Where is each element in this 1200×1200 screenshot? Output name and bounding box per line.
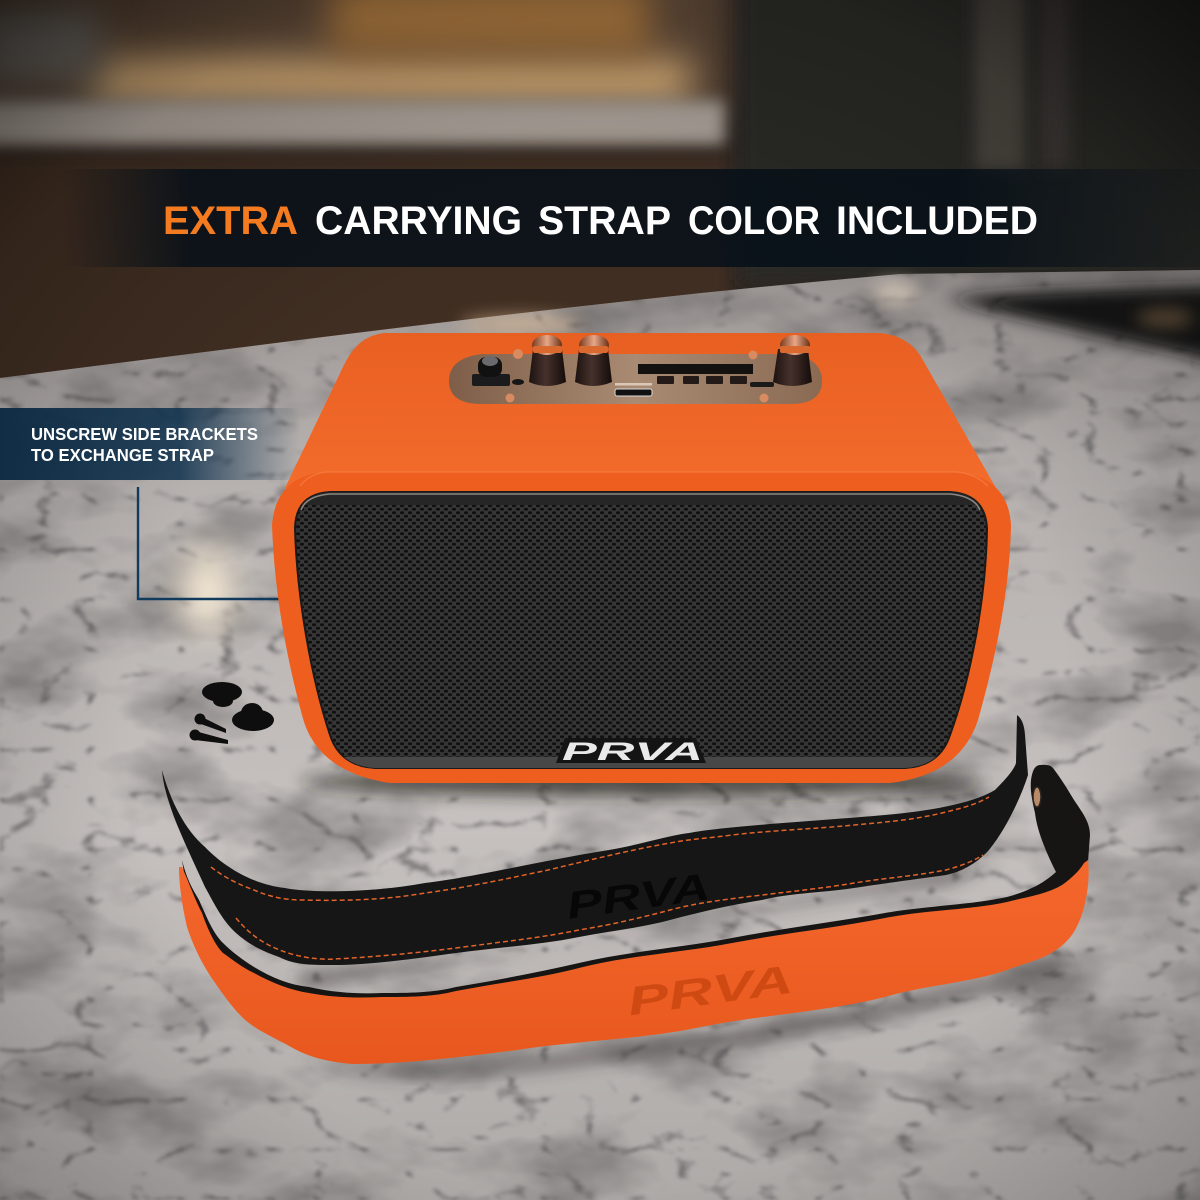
strap hole (1033, 787, 1041, 807)
embossed logo: PRVA (625, 958, 795, 1024)
title band (0, 169, 1200, 267)
screw 2 (190, 730, 228, 744)
callout text: UNSCREW SIDE BRACKETS (31, 424, 258, 444)
speaker grille (290, 492, 990, 769)
title text: STRAP (538, 199, 671, 243)
embossed logo: PRVA (564, 866, 713, 928)
speaker (272, 333, 1011, 783)
title text: CARRYING (315, 199, 522, 243)
control plate (449, 335, 822, 404)
bracket disc 2 (232, 703, 274, 731)
callout leader line (138, 487, 290, 599)
grille bottom lip (344, 757, 936, 768)
upper stitching (211, 797, 989, 900)
lower stitching (236, 855, 983, 959)
black strap (162, 715, 1028, 965)
background: blurred kitchen (0, 0, 1200, 400)
callout: unscrew side brackets (0, 408, 300, 480)
orange strap (179, 765, 1090, 1064)
grille top lip (290, 492, 990, 505)
slot and usb-c (615, 382, 774, 387)
mic jack (512, 379, 524, 385)
callout text: TO EXCHANGE STRAP (31, 445, 214, 465)
title text: COLOR (688, 199, 820, 243)
bracket disc 1 (202, 682, 242, 707)
strap black lining and tab (182, 765, 1090, 1008)
speaker edge highlight (300, 472, 988, 486)
usb port (615, 389, 652, 396)
title text: EXTRA (163, 199, 298, 243)
speaker shadow (300, 768, 980, 796)
speaker front body (272, 472, 1011, 783)
strap shadows (300, 860, 1070, 1078)
strap orange face (179, 860, 1089, 1064)
knob middle (575, 335, 612, 386)
display (638, 364, 753, 374)
speaker top face (285, 333, 996, 488)
screw 1 (194, 714, 226, 733)
PRVA badge: PRVA (562, 738, 703, 766)
grille highlight (301, 494, 980, 510)
aux jack knob (472, 356, 510, 386)
screws and brackets (190, 682, 274, 744)
knob left (529, 335, 566, 386)
screws (506, 349, 768, 402)
knob right (773, 335, 812, 386)
PRVA badge (556, 738, 706, 766)
buttons (657, 376, 747, 384)
title text: INCLUDED (836, 199, 1038, 243)
